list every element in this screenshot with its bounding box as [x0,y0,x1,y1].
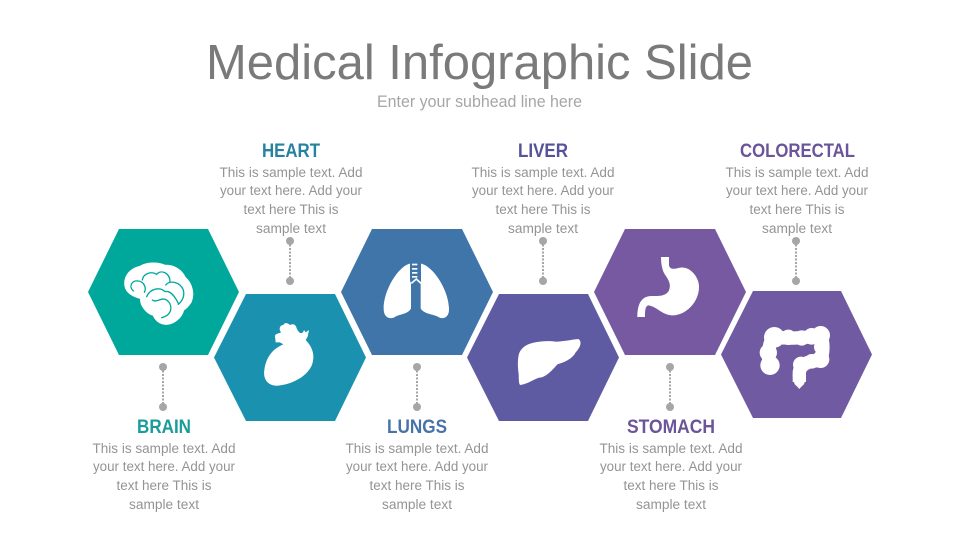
hexagon: brain [88,229,239,355]
heading: lungs: LUNGS [387,416,447,438]
text: colorectal: your text here. Add your [726,183,868,198]
hexagon: stomach [594,229,746,355]
text: heart: your text here. Add your [220,183,362,198]
connector: lungs [413,363,421,411]
icon: stomach [637,257,699,317]
text: liver: sample text [508,221,578,236]
text: colorectal: sample text [762,221,832,236]
icon: colon [760,326,830,389]
heading: heart: HEART [262,140,320,162]
text: colorectal: This is sample text. Add [726,165,868,180]
subtitle: Enter your subhead line here [377,92,582,111]
title: Medical Infographic Slide [206,36,753,90]
text: lungs [346,441,488,512]
text: heart: This is sample text. Add [220,165,362,180]
hexagon: heart [214,294,366,421]
connector: colorectal [792,237,800,285]
text: heart [220,165,362,236]
text: stomach: text here This is [624,478,719,493]
text: liver: your text here. Add your [472,183,614,198]
heading: colorectal: COLORECTAL [740,140,855,162]
text: stomach: your text here. Add your [600,459,742,474]
text: brain: This is sample text. Add [92,441,236,456]
hexagon: liver [467,294,619,421]
text: stomach: This is sample text. Add [600,441,742,456]
heading: liver: LIVER [518,140,568,162]
icon: liver [518,339,581,385]
text: lungs: This is sample text. Add [346,441,488,456]
panel: heart [214,140,366,421]
text: brain [92,441,236,512]
heading: stomach: STOMACH [627,416,715,438]
text: brain: text here This is [116,478,212,493]
connector: brain [159,363,167,411]
text: stomach [600,441,742,512]
icon: lungs [384,264,449,318]
panel: liver [467,140,619,421]
text: liver: This is sample text. Add [472,165,614,180]
hexagon: lungs [341,229,493,355]
panel: brain [88,229,239,512]
panel: colorectal [721,140,872,418]
heading: brain: BRAIN [137,416,191,438]
panel: lungs [341,229,493,512]
panel: stomach [594,229,746,512]
hexagon: colorectal [721,291,872,418]
text: liver: text here This is [496,202,591,217]
text: colorectal [726,165,868,236]
connector: liver [539,237,547,285]
text: colorectal: text here This is [750,202,845,217]
icon: heart [264,323,313,386]
text: brain: sample text [129,497,199,512]
text: heart: sample text [256,221,326,236]
text: stomach: sample text [636,497,706,512]
connector: heart [286,237,294,285]
text: lungs: text here This is [370,478,465,493]
text: liver [472,165,614,236]
connector: stomach [666,363,674,411]
text: heart: text here This is [244,202,339,217]
icon: brain [125,263,192,324]
text: lungs: sample text [382,497,452,512]
text: lungs: your text here. Add your [346,459,488,474]
text: brain: your text here. Add your [93,459,235,474]
